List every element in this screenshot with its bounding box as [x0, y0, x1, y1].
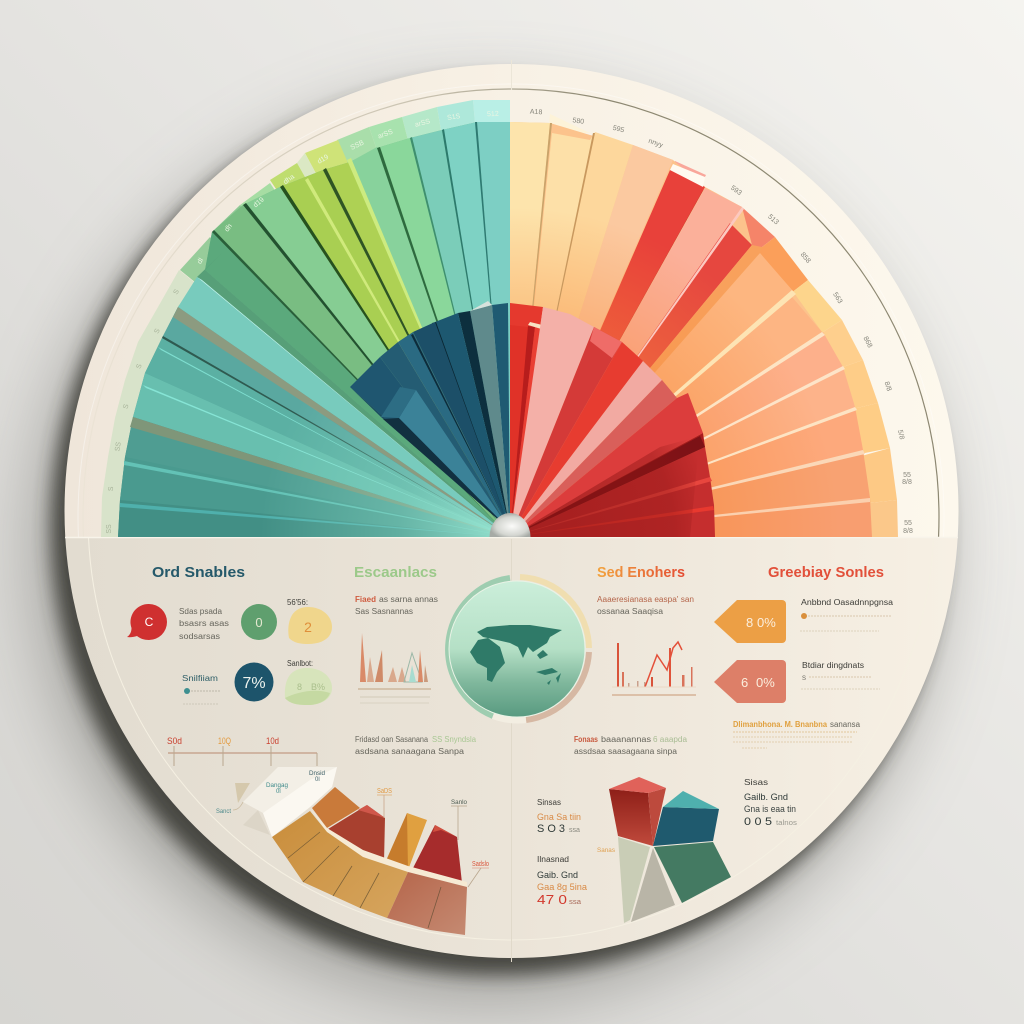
icon: red speech bubble — [127, 604, 167, 640]
fan label strip: left pale tabs — [101, 270, 510, 537]
fan backing — [118, 122, 510, 537]
caption: Fiaed — [355, 595, 376, 604]
chart labels: Sadslo — [472, 861, 489, 868]
red band — [387, 872, 467, 935]
tag: orange: 0% — [757, 615, 776, 630]
main disc — [64, 60, 958, 962]
globe — [442, 574, 592, 724]
text block: bsasrs asas — [179, 619, 229, 628]
text block — [179, 607, 229, 641]
text block: centre right caption — [574, 735, 688, 756]
timeline: S0d — [167, 736, 182, 746]
chart labels: 0l — [276, 789, 281, 795]
text block: pie left lower: 47 0 — [537, 892, 567, 907]
text block: pie left upper: Gna Sa tiin — [537, 812, 581, 823]
fan labels: left: dh — [224, 223, 234, 233]
panel: percentage tags — [714, 598, 894, 703]
fan labels: left: S — [136, 363, 144, 370]
legend row — [183, 688, 221, 704]
text block: pie right: talnos — [776, 820, 798, 827]
warm shading — [510, 122, 872, 537]
cream ridge — [310, 808, 467, 887]
chart labels: Sanct — [216, 809, 231, 815]
spike chart — [358, 633, 431, 703]
text block: centre left caption: Fridasd oan Sasanana — [355, 735, 428, 744]
fan wedges: teal and green main — [118, 122, 510, 537]
fan labels: left: arSS — [414, 118, 431, 129]
panel: inner blue sector — [350, 301, 510, 530]
centre hub dome — [490, 513, 530, 537]
timeline: 10d — [266, 736, 279, 746]
panel: polyhedron pie — [597, 777, 731, 923]
fan labels: left: dl — [196, 257, 205, 265]
heading: Sed Enohers: Sed Enohers — [597, 564, 685, 581]
fan labels: left: d19 — [252, 196, 266, 209]
text block: centre right caption: baaanannas — [601, 735, 651, 744]
fan labels: left: S — [173, 288, 181, 296]
text block: pie right — [744, 778, 798, 828]
text block: pie right: 0 0 5 — [744, 816, 772, 828]
text block: centre right caption: Fonaas — [574, 735, 598, 744]
text block: pie left lower: Gaib. Gnd — [537, 870, 578, 881]
text block: pie right: Gailb. Gnd — [744, 792, 788, 803]
icon: teal circle: 7% — [242, 675, 266, 692]
fan labels: right: 595 — [612, 125, 625, 134]
icon: yellow blob — [288, 607, 332, 644]
caption: as sarna annas — [379, 595, 438, 604]
caption: ossanaa Saaqisa — [597, 607, 664, 616]
text block: centre left caption: SS Snyndsla — [432, 735, 477, 744]
fan labels: right: 868 — [861, 335, 873, 349]
fan labels: right — [530, 109, 913, 535]
text block: centre right caption: 6 aaapda — [653, 735, 688, 744]
fan wedges: right main — [510, 122, 872, 537]
tag details: red: S — [802, 676, 806, 682]
tag: orange: 8 — [746, 615, 753, 630]
tag details: orange — [800, 598, 894, 631]
panel: left sparkline — [355, 595, 438, 703]
heading: Greebiay Sonles: Greebiay Sonles — [768, 564, 884, 581]
paper folds — [235, 767, 337, 837]
tag details: red — [801, 661, 880, 689]
fan labels: right: 580 — [572, 117, 585, 126]
line and bar chart — [612, 642, 696, 695]
fan labels: right: 55 — [903, 472, 911, 479]
fan labels: left — [106, 111, 499, 534]
fan labels: right: 5/8 — [896, 429, 905, 440]
fan labels: left: S — [153, 327, 162, 335]
text block: pie left upper: ssa — [569, 827, 580, 834]
text block: pie left upper — [537, 798, 581, 835]
icon: green circle: 0 — [255, 615, 263, 630]
tag: red: 0% — [756, 675, 775, 690]
chart labels: 0l — [315, 777, 320, 783]
text block: centre left caption: asdsana sanaagana Sanpa — [355, 747, 465, 756]
fan labels: left: arSS — [377, 129, 394, 141]
text block: pie left lower: Ilnasnad — [537, 855, 569, 864]
timeline — [167, 736, 317, 766]
tag: red: 6 — [741, 675, 748, 690]
fan tabs: upper left — [180, 100, 510, 537]
fan labels: right: 513 — [766, 213, 780, 226]
tag details: red: Btdiar dingdnats — [802, 661, 864, 670]
text block: pie left lower: Gaa 8g 5ina — [537, 882, 588, 893]
caption: Aaaeresianasa easpa' san — [597, 595, 694, 604]
text block: right note: sanansa — [830, 720, 861, 729]
tag details: orange: Anbbnd Oasadnnpgnsa — [801, 598, 894, 607]
ring segments — [448, 577, 589, 720]
icon: red speech bubble: C — [145, 615, 154, 629]
fan labels: left: d19 — [316, 154, 330, 166]
fan labels: left: S — [108, 486, 115, 492]
teal block — [653, 791, 719, 846]
timeline: 10Q — [218, 736, 231, 746]
heading: Escaanlacs: Escaanlacs — [354, 564, 437, 581]
text block: pie left lower: ssa — [569, 899, 581, 906]
fan labels: left: S — [123, 403, 131, 410]
heading: Ord Snables: Ord Snables — [152, 564, 245, 581]
centre glow on teal wedges — [118, 307, 510, 537]
red block — [609, 777, 666, 846]
fan labels: right: A18 — [530, 109, 543, 116]
fan labels: left: dha — [282, 173, 296, 186]
fan labels: right: 8/8 — [902, 479, 912, 486]
tag: red — [714, 660, 786, 703]
fan backing — [510, 122, 872, 537]
icon: yellow blob: 2 — [304, 619, 312, 635]
fan labels: right: 8/8 — [883, 381, 892, 392]
fan labels: left: SS — [106, 524, 113, 534]
band creases — [288, 832, 441, 928]
pale block — [618, 837, 650, 923]
text block: centre left caption — [355, 735, 477, 756]
icon: teal circle — [234, 662, 274, 702]
chart labels: Dnsid — [309, 771, 325, 777]
caption — [597, 595, 694, 616]
text block: pie right: Gna is eaa tin — [744, 804, 796, 815]
fan labels: right: 563 — [831, 291, 843, 305]
fan labels: left: SS — [114, 441, 123, 452]
fan labels: right: 858 — [799, 251, 812, 265]
label: Snilfiiam — [182, 674, 218, 683]
fan labels: right: nnyy — [647, 138, 664, 150]
fan tabs: right — [510, 114, 898, 537]
text block: pie left upper: S O 3 — [537, 823, 565, 835]
panel: right sparkline — [597, 595, 696, 695]
panel: left stats — [127, 598, 332, 705]
map shapes — [470, 625, 562, 685]
caption — [355, 595, 438, 616]
fan labels: left: S1S — [447, 113, 461, 122]
chart labels: Dangag — [266, 783, 288, 789]
label: Sanlbot: — [287, 659, 313, 668]
caption: Sas Sasnannas — [355, 607, 413, 616]
text block: right note — [733, 720, 861, 748]
icon: pale green blob: 8 — [297, 682, 302, 692]
fan labels: right: 593 — [729, 185, 743, 197]
chart labels — [216, 771, 489, 887]
fan labels: right: 55 — [904, 520, 912, 527]
back peaks — [312, 787, 462, 883]
orange band — [272, 811, 408, 918]
text block: centre right caption: assdsaa saasagaana sinpa — [574, 747, 678, 756]
tag: orange — [714, 600, 786, 643]
chart labels: SaDS — [377, 788, 392, 795]
label: Sanas — [597, 847, 616, 854]
fan bevels: separators — [510, 123, 870, 537]
text block: pie right: Sisas — [744, 778, 768, 787]
panel: left cool fan — [101, 100, 510, 537]
text block: right note: Dlimanbhona. M. Bnanbna — [733, 720, 828, 729]
fan bevels: highlights and dark edges — [120, 122, 510, 537]
grey block — [631, 848, 675, 922]
panel: inner red sector — [510, 303, 715, 537]
fan labels: left: 512 — [487, 111, 499, 118]
text block: pie left lower — [537, 855, 588, 907]
icon: pale green blob — [285, 668, 332, 705]
chart labels: Sanlo — [451, 800, 468, 806]
text block: pie left upper: Sinsas — [537, 798, 561, 807]
panel: folded area chart — [216, 767, 489, 935]
icon: pale green blob: B% — [311, 682, 325, 692]
fan labels: right: 8/8 — [903, 528, 913, 535]
folded front wedge — [350, 387, 510, 530]
fan labels: left: SSB — [350, 139, 365, 152]
dark shading — [510, 436, 700, 537]
text block: sodsarsas — [179, 632, 220, 641]
label: 56'56: — [287, 598, 308, 607]
icon: green circle — [241, 604, 277, 640]
green block — [654, 842, 731, 903]
text block: Sdas psada — [179, 607, 223, 616]
disc shadow — [38, 81, 945, 998]
panel: right warm fan — [510, 109, 913, 537]
